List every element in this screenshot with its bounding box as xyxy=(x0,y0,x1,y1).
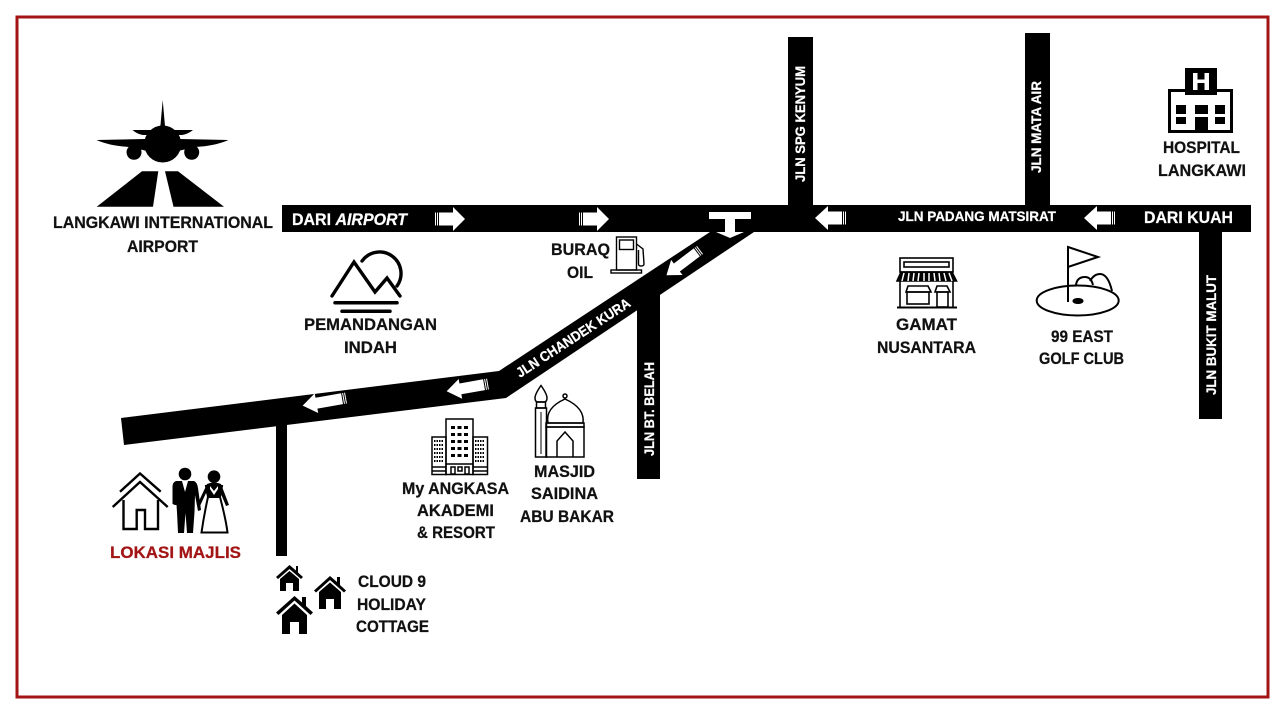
label: 99 East Golf Club: GOLF CLUB xyxy=(1039,350,1124,368)
icon: shop xyxy=(897,258,957,308)
arrow: westbound 1 xyxy=(815,206,846,230)
label: Jln Bukit Malut: JLN BUKIT MALUT xyxy=(1203,275,1219,395)
arrow: eastbound 2 xyxy=(579,207,609,231)
icon: airplane and runway xyxy=(96,100,228,207)
icon: cottages xyxy=(276,565,346,634)
arrow: lower road 2 xyxy=(301,388,348,415)
label: Pemandangan Indah: PEMANDANGAN xyxy=(304,316,437,334)
groom xyxy=(172,468,201,533)
cottage top left xyxy=(276,565,303,591)
arrow: eastbound 1 xyxy=(435,207,465,231)
road: branch to Cloud 9 xyxy=(276,424,287,556)
label: Dari Kuah: DARI KUAH xyxy=(1144,209,1233,227)
label: 99 East Golf Club: 99 EAST xyxy=(1051,328,1113,346)
label: Cloud 9 Holiday Cottage xyxy=(356,573,429,636)
label: 99 East Golf Club xyxy=(1039,328,1124,368)
main road: Dari Airport to Dari Kuah xyxy=(282,205,1251,232)
cottage right xyxy=(314,576,346,609)
icon: hotel building xyxy=(432,419,488,474)
road: Jln Chandek Kura xyxy=(121,232,754,445)
junction T marker xyxy=(709,212,751,238)
road network xyxy=(121,33,1251,556)
icon: house and wedding couple xyxy=(113,468,229,533)
label: Buraq Oil: OIL xyxy=(567,264,593,282)
icon: fuel pump xyxy=(611,237,644,273)
label: Dari Airport: DARI AIRPORT xyxy=(292,211,409,229)
label: Lokasi Majlis: LOKASI MAJLIS xyxy=(110,544,241,562)
icon: mountain view xyxy=(332,252,401,311)
label: My Angkasa: My ANGKASA xyxy=(402,480,509,498)
arrow: lower road 1 xyxy=(445,374,490,401)
label: Masjid Saidina Abu Bakar: MASJID xyxy=(534,463,595,481)
label: Gamat Nusantara: NUSANTARA xyxy=(877,339,976,357)
label: Jln Mata Air: JLN MATA AIR xyxy=(1028,81,1044,173)
icon: golf course xyxy=(1037,247,1119,316)
label: Cloud 9 Holiday Cottage: COTTAGE xyxy=(356,618,429,636)
label: My Angkasa: & RESORT xyxy=(417,524,495,542)
icon: mosque xyxy=(535,386,584,457)
label: Pemandangan Indah: INDAH xyxy=(344,339,397,357)
label: My Angkasa: AKADEMI xyxy=(417,502,494,520)
house xyxy=(113,474,168,529)
label: Masjid Saidina Abu Bakar xyxy=(520,463,614,526)
arrow: diagonal on Chandek Kura xyxy=(661,242,706,283)
label: Buraq Oil: BURAQ xyxy=(551,241,610,259)
road: Jln Mata Air xyxy=(1025,33,1050,205)
road: Jln Bt. Belah xyxy=(637,285,660,479)
label: Pemandangan Indah xyxy=(304,316,437,357)
label: Hospital Langkawi: LANGKAWI xyxy=(1158,162,1246,180)
label: Masjid Saidina Abu Bakar: ABU BAKAR xyxy=(520,508,614,526)
label: Jln Chandek Kura: JLN CHANDEK KURA xyxy=(513,295,633,381)
label: Masjid Saidina Abu Bakar: SAIDINA xyxy=(531,485,598,503)
label: Hospital Langkawi xyxy=(1158,139,1246,180)
bride xyxy=(198,470,229,532)
label: Jln Spg Kenyum: JLN SPG KENYUM xyxy=(792,66,808,182)
label: Jln Bt. Belah: JLN BT. BELAH xyxy=(641,362,657,456)
label: airport xyxy=(53,214,273,256)
road labels xyxy=(292,66,1233,456)
label: Cloud 9 Holiday Cottage: CLOUD 9 xyxy=(358,573,426,591)
label: Hospital Langkawi: HOSPITAL xyxy=(1163,139,1240,157)
label: Gamat Nusantara xyxy=(877,316,976,357)
label: Gamat Nusantara: GAMAT xyxy=(896,316,957,334)
road: Jln Bukit Malut xyxy=(1199,232,1222,419)
label: My Angkasa xyxy=(402,480,509,542)
label: Cloud 9 Holiday Cottage: HOLIDAY xyxy=(357,596,426,614)
road: Jln Spg Kenyum xyxy=(788,37,813,205)
cottage bottom xyxy=(276,596,313,634)
icon: hospital xyxy=(1170,68,1232,132)
label: airport: LANGKAWI INTERNATIONAL xyxy=(53,214,273,232)
label: Jln Padang Matsirat: JLN PADANG MATSIRAT xyxy=(898,208,1056,224)
arrow: westbound 2 xyxy=(1084,206,1115,230)
label: Buraq Oil xyxy=(551,241,610,282)
label: airport: AIRPORT xyxy=(127,238,198,256)
